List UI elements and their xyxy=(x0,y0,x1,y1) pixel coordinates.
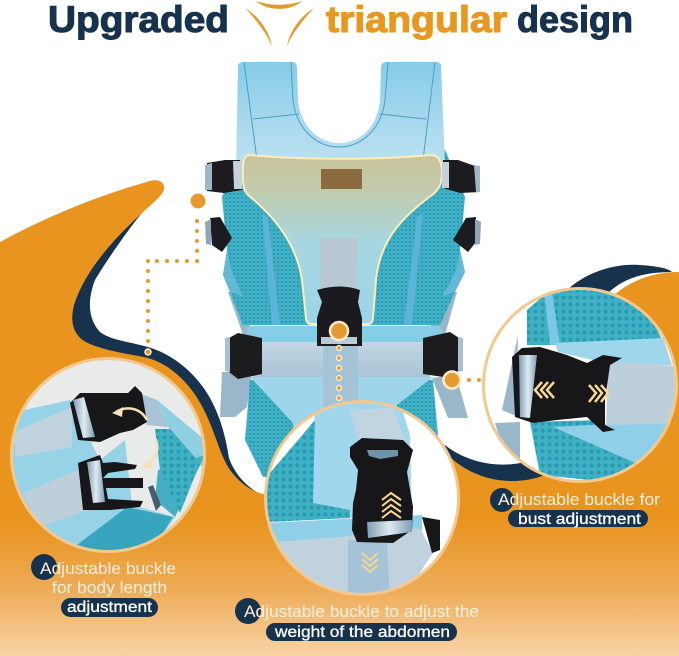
up chevrons xyxy=(382,493,401,518)
grey strap xyxy=(278,528,433,593)
mesh rim xyxy=(223,250,243,296)
detail circle: abdomen buckle xyxy=(264,400,460,600)
mesh xyxy=(264,420,350,522)
title xyxy=(48,0,633,40)
lower left buckle xyxy=(225,333,262,379)
center vertical strap xyxy=(323,343,358,409)
side straps xyxy=(220,292,468,418)
top strap xyxy=(350,408,405,440)
orange wave background xyxy=(0,180,679,656)
side seams xyxy=(262,213,423,325)
upper buckle xyxy=(70,386,147,442)
light blue panel xyxy=(312,402,412,520)
caption: abdomen: weight of the abdomen xyxy=(274,624,450,641)
center buckle xyxy=(317,286,362,346)
lower right buckle xyxy=(423,332,463,378)
mesh body xyxy=(222,150,465,325)
caption: bust: Adjustable buckle for xyxy=(498,490,660,509)
caption: body length: Adjustable buckle xyxy=(40,559,176,578)
teal lower body xyxy=(77,507,173,553)
shoulder seams xyxy=(244,62,435,160)
shoulder panel xyxy=(236,62,445,165)
belly strap xyxy=(253,342,430,377)
upper left buckle xyxy=(205,160,242,193)
mesh strap xyxy=(155,429,200,513)
caption: abdomen: Adjustable buckle to adjust the xyxy=(244,602,479,621)
clip right xyxy=(453,217,481,252)
buckle xyxy=(512,347,622,432)
upper right buckle xyxy=(442,160,480,193)
clip left xyxy=(205,217,232,252)
down chevrons xyxy=(362,553,378,572)
caption: body length: for body length xyxy=(52,578,167,597)
title: Upgraded xyxy=(48,0,229,40)
icon: triangular logo xyxy=(245,1,314,46)
caption: abdomen xyxy=(235,598,479,641)
waist band xyxy=(264,515,422,543)
left grey flaps xyxy=(502,335,518,416)
grey strap xyxy=(606,362,679,425)
grey straps xyxy=(13,407,72,457)
caption: body length xyxy=(31,554,176,617)
arrows xyxy=(116,408,147,420)
lower panel xyxy=(250,377,433,480)
blue band xyxy=(555,338,672,365)
detail circle: body length buckle xyxy=(10,357,206,553)
silver strap xyxy=(320,238,357,292)
detail circle: bust buckle xyxy=(482,287,679,483)
lower buckle xyxy=(78,455,143,510)
lower mesh and panel xyxy=(530,420,640,483)
lower mesh xyxy=(245,380,438,480)
title: design xyxy=(517,0,633,40)
right blue panel xyxy=(157,400,205,470)
caption: body length: adjustment xyxy=(67,599,153,616)
triangular highlight panel xyxy=(243,155,442,324)
waist band xyxy=(247,326,444,345)
right chevrons xyxy=(589,385,608,402)
title: triangular xyxy=(326,0,507,40)
upper mesh xyxy=(527,290,662,345)
baby carrier product xyxy=(205,62,481,480)
dotted connector: right xyxy=(444,372,481,388)
blue body xyxy=(10,400,175,553)
dotted connector: center xyxy=(330,322,348,400)
buckle xyxy=(350,438,413,543)
left chevrons xyxy=(535,382,554,398)
brown label patch xyxy=(321,169,362,189)
dotted connector: left xyxy=(145,194,206,355)
caption: bust: bust adjustment xyxy=(518,511,642,528)
caption: bust xyxy=(490,488,660,528)
navy ribbon accents xyxy=(40,198,672,500)
